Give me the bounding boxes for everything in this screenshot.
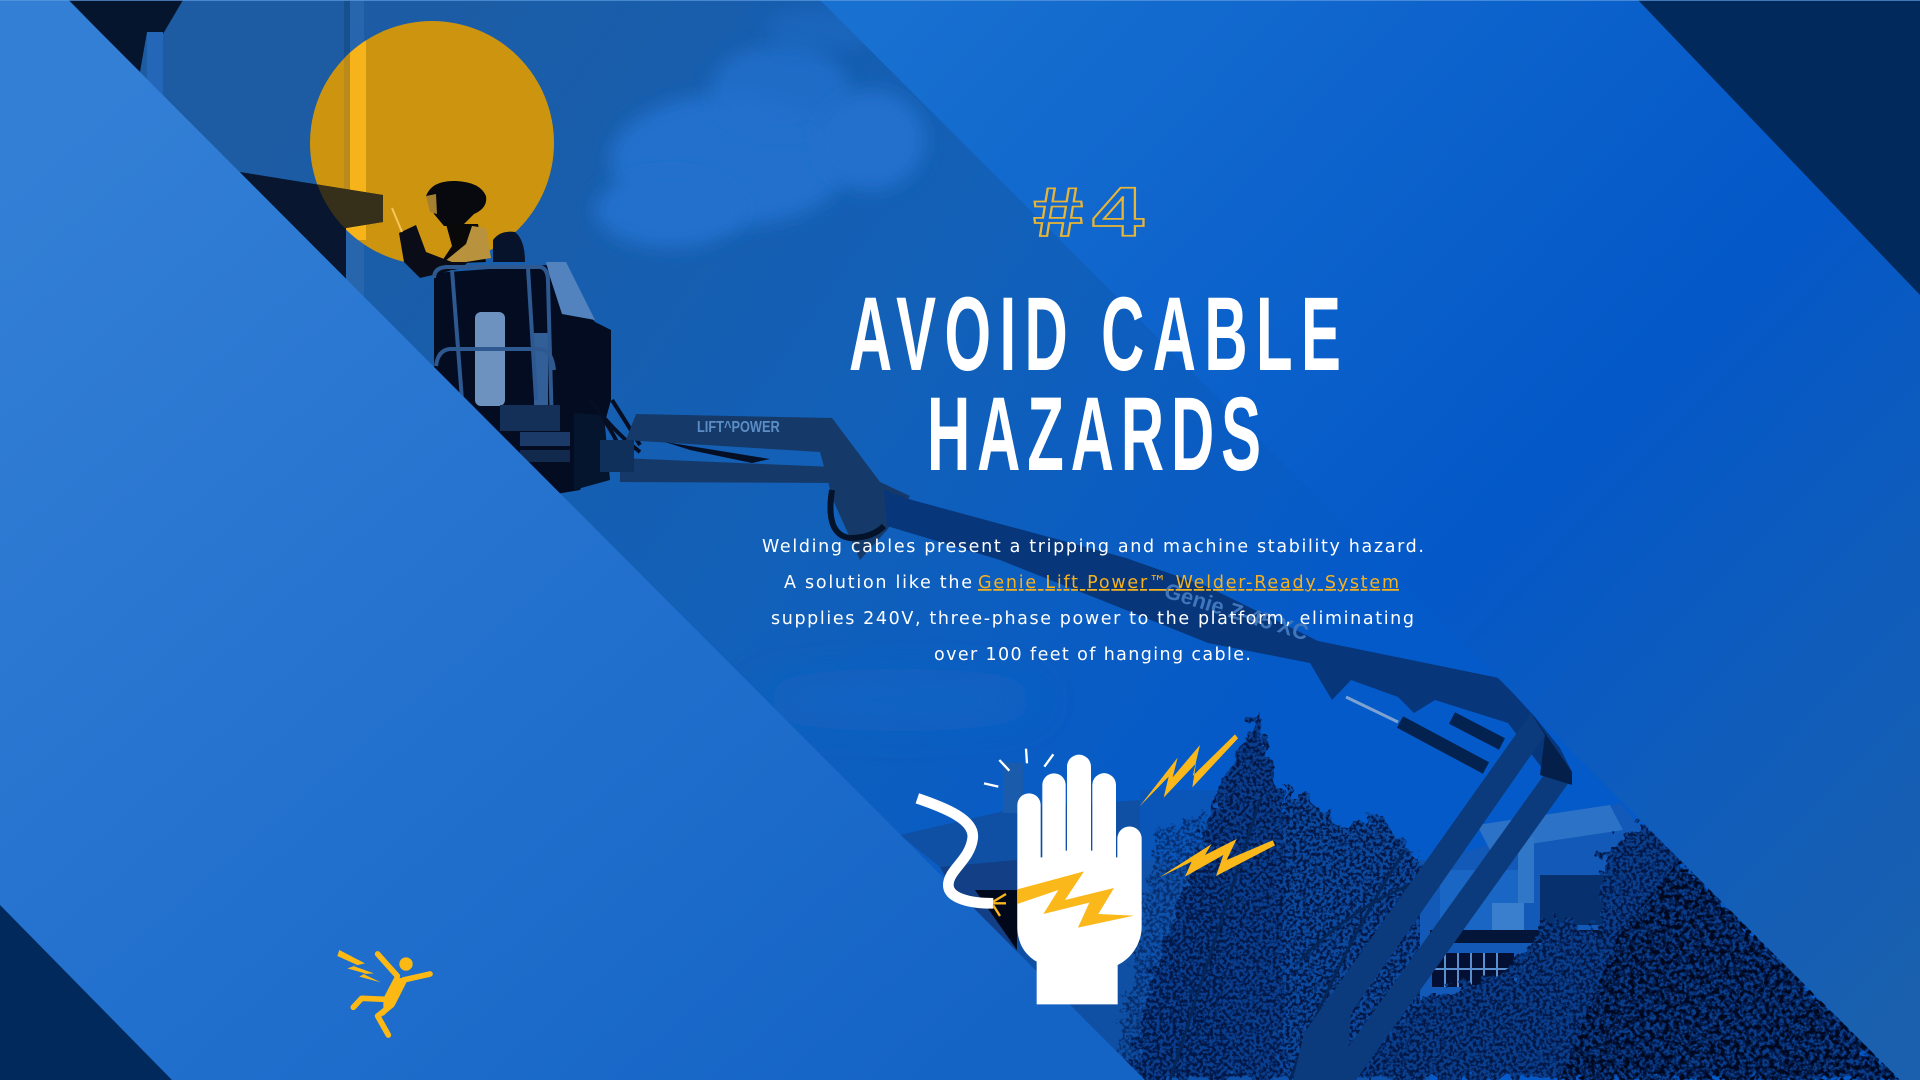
title [849, 277, 1341, 493]
body line 1: Welding cables present a tripping and machine stability hazard. [762, 537, 1424, 557]
clouds [595, 8, 1040, 718]
sun circle [310, 21, 554, 265]
icon: falling person with bolt [337, 950, 430, 1035]
title line 1: AVOID CABLE [849, 277, 1341, 393]
body line 4: over 100 feet of hanging cable. [934, 645, 1251, 665]
tree cluster left [1110, 713, 1440, 1080]
body line 3: supplies 240V, three-phase power to the platform, eliminating [771, 609, 1414, 629]
riser boom [1293, 713, 1572, 1080]
head [399, 957, 413, 971]
link: Genie Lift Power™ Welder-Ready System [978, 573, 1399, 593]
body text [762, 537, 1424, 665]
boom cylinders [1346, 697, 1502, 768]
tree cluster right [1351, 823, 1900, 1080]
bolt [337, 950, 381, 982]
cable [917, 798, 993, 903]
main boom [884, 490, 1572, 772]
lift jib arm [600, 414, 910, 560]
spark lines [984, 749, 1053, 787]
lift basket [434, 262, 640, 494]
building left [900, 763, 1430, 1080]
left light-blue diagonal panel [0, 0, 1145, 1080]
boom lift text: LIFT^POWER [697, 419, 780, 436]
welder figure [392, 181, 491, 278]
top-left structure [69, 0, 183, 98]
icon: shocked hand with cable [917, 734, 1275, 1004]
pole inside circle [344, 40, 366, 240]
hydraulic hose [830, 490, 884, 538]
top edge highlight [0, 0, 1920, 1]
upper bolt [1139, 734, 1238, 807]
body line 2: A solution like the [784, 573, 972, 593]
palm bolt [1017, 871, 1134, 928]
lower bolt [1159, 839, 1275, 877]
building right [1420, 803, 1642, 1000]
corner triangle top-right [1638, 0, 1920, 295]
corner triangle bottom-left [0, 905, 172, 1080]
exposed wires [993, 894, 1006, 916]
boom model text: Genie Z-45 XC [1162, 578, 1312, 645]
limbs [353, 954, 430, 1035]
title line 2: HAZARDS [927, 377, 1261, 493]
hash glyph: # [1027, 172, 1089, 251]
torso [383, 976, 407, 1016]
welding beam [240, 172, 383, 278]
hand [1017, 755, 1142, 1004]
digit glyph: 4 [1092, 173, 1144, 251]
gas bottle on basket [493, 232, 525, 262]
pole [344, 0, 364, 300]
number heading [1027, 172, 1144, 251]
